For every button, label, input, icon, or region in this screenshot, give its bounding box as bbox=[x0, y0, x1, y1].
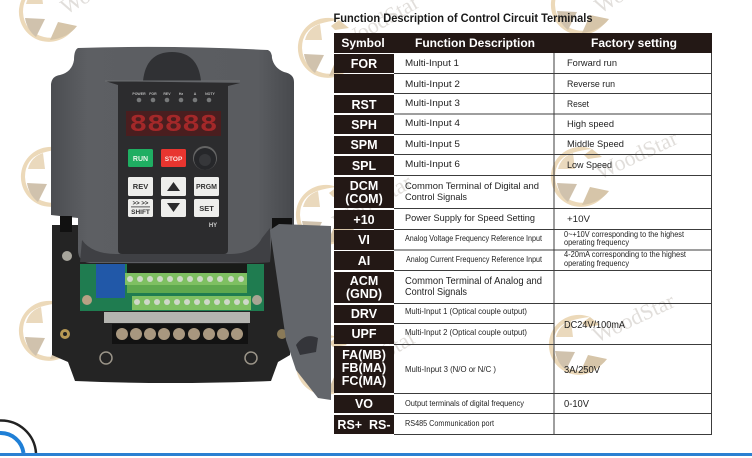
power terminals bbox=[112, 324, 248, 344]
function descriptions: Multi-Input 1 bbox=[405, 58, 459, 69]
function descriptions: Multi-Input 6 bbox=[405, 159, 460, 170]
symbol column: FOR bbox=[351, 57, 377, 71]
function descriptions: Analog Voltage Frequency Reference Input bbox=[405, 234, 543, 243]
up key bbox=[161, 177, 186, 196]
open terminal flap bbox=[270, 224, 331, 400]
keypad panel bbox=[105, 81, 240, 254]
factory settings: operating frequency bbox=[564, 238, 629, 247]
symbol column: SPL bbox=[352, 159, 377, 173]
symbol column: RS+ RS- bbox=[337, 418, 391, 432]
function descriptions: Multi-Input 3 (N/O or N/C ) bbox=[405, 365, 496, 374]
LED display: 88888 bbox=[130, 112, 218, 139]
RUN button: RUN bbox=[133, 156, 148, 163]
control dial bbox=[193, 146, 217, 170]
footer logo arcs bbox=[0, 420, 36, 453]
symbol column bbox=[334, 54, 394, 434]
REV key bbox=[128, 177, 153, 196]
housing screws bbox=[60, 251, 287, 364]
function descriptions: Output terminals of digital frequency bbox=[405, 399, 524, 408]
header row bbox=[334, 33, 712, 53]
factory settings: Low Speed bbox=[567, 160, 612, 171]
indicator lights: REV bbox=[163, 92, 171, 96]
watermarks: WoodStar bbox=[60, 117, 149, 182]
flap latch bbox=[296, 336, 318, 355]
SET key bbox=[194, 199, 219, 217]
lower terminal strip bbox=[132, 296, 251, 310]
function descriptions: Control Signals bbox=[405, 286, 467, 298]
upper cover bbox=[51, 47, 294, 263]
function descriptions: Analog Current Frequency Reference Input bbox=[406, 255, 543, 264]
symbol column: RST bbox=[352, 98, 377, 112]
symbol column: +10 bbox=[353, 213, 375, 227]
symbol column: VI bbox=[358, 233, 370, 247]
footer rule bbox=[0, 453, 752, 456]
watermarks bbox=[19, 0, 682, 395]
symbol column: AI bbox=[358, 254, 370, 268]
factory settings: 4-20mA corresponding to the highest bbox=[564, 250, 687, 259]
symbol column: SPM bbox=[350, 138, 378, 152]
SET key: SET bbox=[199, 204, 214, 213]
factory settings: DC24V/100mA bbox=[564, 320, 625, 331]
watermarks: WoodStar bbox=[60, 274, 149, 339]
symbol column: VO bbox=[355, 397, 373, 411]
function descriptions: Multi-Input 4 bbox=[405, 118, 460, 129]
symbol column: UPF bbox=[352, 327, 377, 341]
watermarks: WoodStar bbox=[592, 125, 682, 185]
RUN button bbox=[128, 149, 153, 167]
function descriptions: Power Supply for Speed Setting bbox=[405, 213, 535, 224]
watermarks: WoodStar bbox=[328, 169, 417, 234]
symbol column: (GND) bbox=[346, 287, 382, 301]
factory settings: operating frequency bbox=[564, 259, 629, 268]
symbol column: (COM) bbox=[345, 192, 383, 206]
symbol column: SPH bbox=[351, 118, 377, 132]
indicator lights: NOTY bbox=[205, 92, 216, 96]
cover handle bbox=[143, 52, 201, 81]
terminal housing bbox=[52, 225, 290, 383]
SHIFT key: >> >> bbox=[133, 201, 149, 207]
factory settings: High speed bbox=[567, 119, 614, 130]
PRGM key: PRGM bbox=[196, 184, 217, 191]
factory settings: Middle Speed bbox=[567, 139, 624, 150]
control board bbox=[80, 264, 264, 311]
header row: Factory setting bbox=[591, 36, 677, 50]
function descriptions: Multi-Input 2 bbox=[405, 79, 460, 90]
symbol column: DRV bbox=[351, 307, 378, 321]
REV key: REV bbox=[133, 182, 148, 191]
indicator lights: Hz bbox=[179, 92, 183, 96]
function descriptions: Multi-Input 3 bbox=[405, 98, 460, 109]
PRGM key bbox=[194, 177, 219, 196]
HY mark: HY bbox=[209, 223, 217, 229]
SHIFT key: SHIFT bbox=[131, 209, 150, 216]
factory settings: Reset bbox=[567, 99, 589, 110]
symbol column: FA(MB) bbox=[342, 348, 386, 362]
factory settings: 0-10V bbox=[564, 399, 589, 410]
symbol column: ACM bbox=[350, 274, 378, 288]
header row: Function Description bbox=[415, 36, 535, 50]
lower panel edge bbox=[80, 228, 270, 262]
factory settings: Forward run bbox=[567, 58, 617, 69]
watermarks: WoodStar bbox=[332, 324, 421, 389]
function descriptions: Multi-Input 5 bbox=[405, 139, 460, 150]
function descriptions: Control Signals bbox=[405, 192, 467, 203]
symbol column: FB(MA) bbox=[342, 361, 386, 375]
table bbox=[334, 33, 712, 434]
factory settings: +10V bbox=[567, 214, 591, 225]
factory settings bbox=[564, 58, 687, 410]
factory settings: 0~+10V corresponding to the highest bbox=[564, 230, 685, 239]
side slots bbox=[60, 216, 292, 232]
function descriptions bbox=[405, 58, 543, 428]
indicator lights: A bbox=[194, 92, 197, 96]
symbol column: FC(MA) bbox=[342, 374, 386, 388]
title: Function Description of Control Circuit Terminals bbox=[334, 13, 592, 25]
SHIFT key bbox=[128, 199, 153, 217]
indicator lights: FOR bbox=[149, 92, 157, 96]
function descriptions: Multi-Input 2 (Optical couple output) bbox=[405, 328, 527, 337]
terminal label strip bbox=[104, 312, 250, 323]
indicator lights bbox=[132, 92, 216, 102]
function descriptions: Common Terminal of Digital and bbox=[405, 181, 539, 192]
function descriptions: Common Terminal of Analog and bbox=[405, 275, 542, 287]
STOP button bbox=[161, 149, 186, 167]
factory settings: 3A/250V bbox=[564, 365, 600, 376]
watermarks: WoodStar bbox=[589, 288, 679, 348]
factory settings: Reverse run bbox=[567, 79, 615, 90]
function descriptions: Multi-Input 1 (Optical couple output) bbox=[405, 307, 527, 316]
device: inverter bbox=[51, 47, 331, 400]
header row: Symbol bbox=[341, 36, 385, 50]
upper terminal strip bbox=[125, 273, 247, 293]
down key bbox=[161, 199, 186, 217]
grid lines bbox=[394, 53, 712, 434]
symbol column: DCM bbox=[350, 179, 378, 193]
function descriptions: RS485 Communication port bbox=[405, 419, 495, 428]
indicator lights: POWER bbox=[132, 92, 146, 96]
STOP button: STOP bbox=[165, 156, 183, 163]
